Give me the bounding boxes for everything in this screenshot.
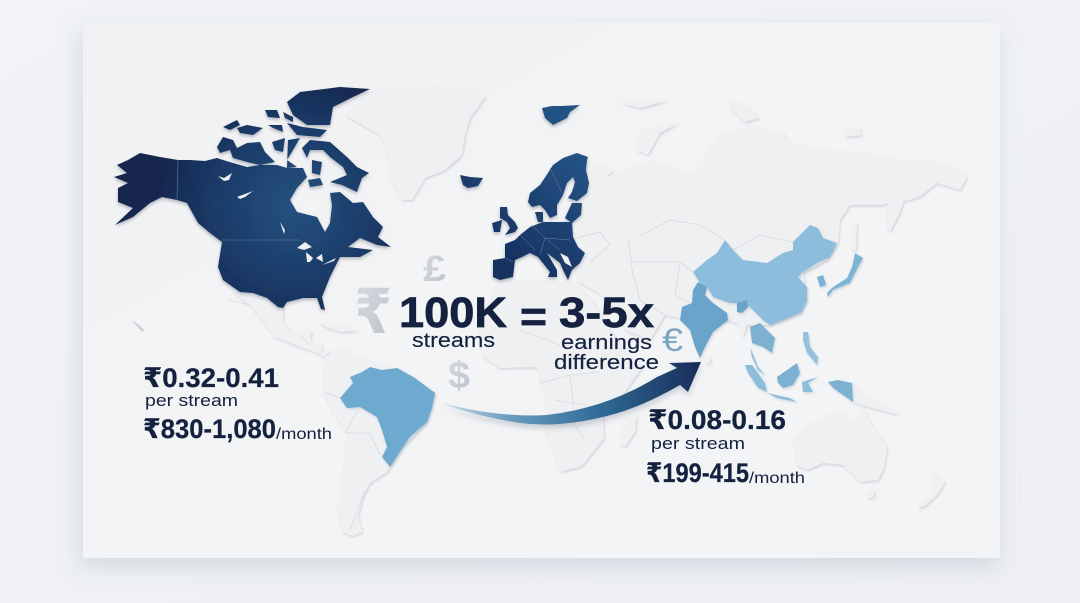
stats: high-paying markets: ₹830-1,080 bbox=[143, 414, 276, 444]
stats: high-paying markets: per stream bbox=[145, 391, 238, 410]
currency symbol: pound: £ bbox=[423, 248, 446, 289]
headline: 100K streams: streams bbox=[412, 330, 495, 352]
region: North America, dark navy bbox=[114, 87, 391, 310]
landmass: Brazil bbox=[340, 367, 435, 467]
landmass: Sri Lanka bbox=[706, 355, 711, 364]
landmass: Continental Europe bbox=[493, 222, 585, 280]
landmass: Kamchatka bbox=[886, 197, 905, 232]
landmass: Scandinavia bbox=[528, 153, 589, 218]
landmass: China bbox=[693, 225, 837, 325]
landmass: New Zealand bbox=[918, 472, 945, 508]
headline: 3-5x earnings difference bbox=[554, 289, 659, 374]
currency symbol: rupee: ₹ bbox=[354, 278, 392, 347]
landmass: Melville Peninsula bbox=[312, 160, 322, 175]
landmass: Denmark bbox=[535, 212, 543, 222]
landmass: Japan bbox=[827, 253, 863, 297]
landmass: Cuba bbox=[318, 322, 358, 332]
landmass: Sumatra bbox=[745, 365, 767, 392]
landmass: Sulawesi bbox=[802, 377, 818, 392]
currency symbol: euro: € bbox=[662, 322, 683, 358]
stats: low-paying markets: ₹0.08-0.16 bbox=[648, 405, 786, 435]
landmass: Southampton Island bbox=[308, 178, 323, 187]
headline: 3-5x earnings difference: earnings bbox=[561, 332, 652, 354]
landmass: Hawaii bbox=[132, 321, 144, 332]
headline: 3-5x earnings difference: 3-5x bbox=[559, 289, 654, 337]
landmass: Australia bbox=[793, 410, 887, 482]
landmass: Malay Peninsula bbox=[750, 347, 765, 375]
landmass: Greenland bbox=[345, 84, 485, 200]
inner borders bbox=[505, 168, 570, 262]
landmass: Philippines bbox=[803, 332, 818, 365]
country borders bbox=[228, 220, 793, 530]
landmass: light grey continents bbox=[233, 84, 967, 536]
landmass: Eurasia bbox=[570, 125, 967, 340]
landmass: Papua New Guinea bbox=[852, 383, 900, 415]
lakes bbox=[218, 173, 336, 265]
landmass: Baltic states bbox=[565, 203, 582, 223]
stats: high-paying markets: /month bbox=[276, 426, 332, 443]
landmass: Canada and USA mainland bbox=[114, 153, 391, 310]
region: Asia and Brazil, light blue bbox=[340, 225, 863, 467]
landmass: Svalbard bbox=[542, 105, 580, 125]
stats: low-paying markets: per stream bbox=[651, 434, 745, 453]
stats: low-paying markets: /month bbox=[749, 470, 805, 487]
stats: low-paying markets: ₹199-415 bbox=[646, 458, 749, 488]
landmass: Victoria and Banks Islands bbox=[217, 137, 275, 165]
stats: high-paying markets bbox=[143, 363, 332, 444]
landmass: Java bbox=[767, 393, 797, 402]
landmass: Myanmar bbox=[728, 303, 752, 337]
landmass: Borneo bbox=[777, 363, 800, 388]
landmass: Arctic archipelago bbox=[223, 110, 327, 168]
landmass: South America bbox=[323, 348, 435, 536]
landmass: Ireland bbox=[492, 220, 502, 232]
landmass: Mexico and Central America bbox=[233, 292, 330, 357]
map card bbox=[83, 23, 1000, 558]
landmass: Arctic islands bbox=[622, 100, 862, 155]
currency symbol: dollar: $ bbox=[448, 355, 470, 397]
landmass: India bbox=[680, 282, 728, 358]
equals sign: = bbox=[520, 293, 547, 340]
landmass: Thailand and Vietnam bbox=[750, 323, 775, 353]
Canada-USA border bbox=[177, 160, 300, 240]
landmass: Africa bbox=[478, 279, 642, 472]
arrow: from Americas to India bbox=[441, 362, 701, 424]
landmass: Tasmania bbox=[866, 490, 875, 498]
landmass: Iceland bbox=[460, 175, 483, 188]
landmass: Madagascar bbox=[620, 416, 637, 447]
landmass: Sakhalin bbox=[852, 222, 857, 250]
region: Europe, dark navy bbox=[460, 105, 589, 280]
landmass: Ellesmere Island bbox=[287, 87, 370, 125]
landmass: Baffin Island bbox=[302, 140, 369, 192]
landmass: Korea bbox=[817, 275, 826, 287]
stats: low-paying markets bbox=[646, 405, 805, 488]
stats: high-paying markets: ₹0.32-0.41 bbox=[143, 363, 279, 393]
Balkan gap bbox=[560, 253, 572, 267]
headline: 100K streams: 100K bbox=[399, 289, 507, 337]
landmass: Northeast India bbox=[737, 300, 748, 313]
landmass: Great Britain bbox=[500, 207, 518, 235]
headline: 3-5x earnings difference: difference bbox=[554, 352, 659, 374]
landmass: West Papua bbox=[828, 380, 853, 402]
world map bbox=[114, 84, 967, 536]
